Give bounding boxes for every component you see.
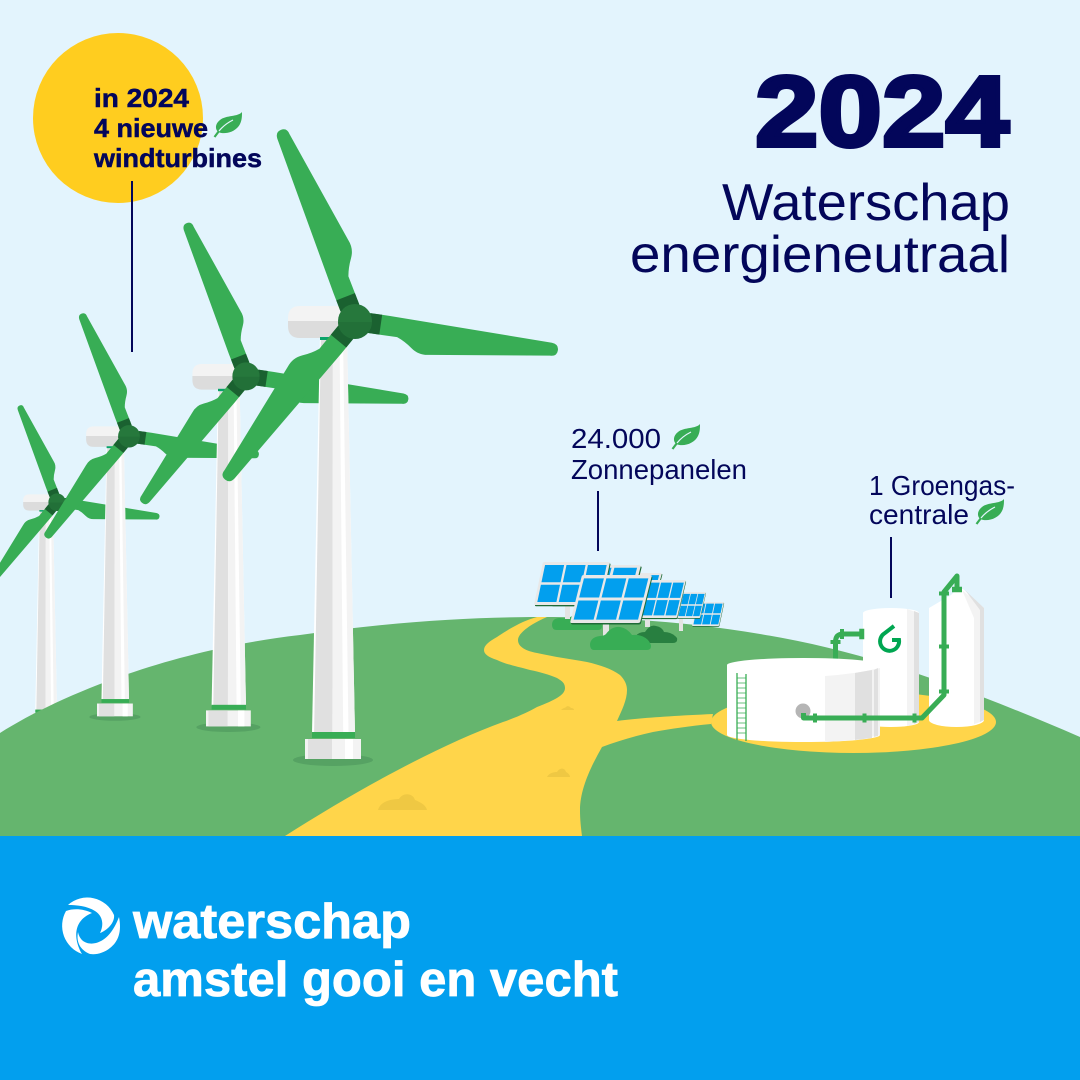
logo text: amstel gooi en vecht xyxy=(133,953,618,1007)
valve xyxy=(796,704,810,718)
panels: far row xyxy=(692,602,724,627)
label: groengascentrale: centrale xyxy=(869,499,969,530)
logo: water swirl xyxy=(62,898,120,954)
leader line: groengascentrale xyxy=(890,537,892,598)
green hill xyxy=(0,617,1080,836)
label: groengascentrale: 1 Groengas- xyxy=(869,470,1015,501)
groengas plant xyxy=(711,576,996,753)
title text: Waterschap xyxy=(722,174,1010,232)
leader line: windturbines xyxy=(131,181,133,352)
panels: front row xyxy=(534,562,611,606)
callout circle: sun xyxy=(33,33,203,203)
bush: left xyxy=(552,613,602,630)
title year: 2024 xyxy=(755,56,1009,168)
icon: leaf groengascentrale xyxy=(976,499,1004,524)
middle tank xyxy=(863,608,919,727)
wind turbine 1 (nearest) xyxy=(207,121,559,766)
label: zonnepanelen xyxy=(571,423,747,485)
main green pipe xyxy=(804,576,962,722)
wind turbine 2 xyxy=(128,216,409,732)
bush: front xyxy=(590,627,651,650)
solar panel field xyxy=(534,562,724,650)
logo text: waterschap xyxy=(132,895,411,949)
callout text: windturbines: 4 nieuwe xyxy=(94,113,208,143)
tall column right xyxy=(929,589,984,727)
callout text: windturbines: in 2024 xyxy=(94,83,190,113)
logo text xyxy=(132,895,618,1007)
wind turbine 3 xyxy=(34,308,260,721)
icon: G logo xyxy=(880,626,899,651)
icon: leaf zonnepanelen xyxy=(672,424,700,449)
bush: dark xyxy=(635,626,677,643)
leader line: zonnepanelen xyxy=(597,491,599,551)
icon: leaf windturbines xyxy=(214,112,242,137)
label: groengascentrale xyxy=(869,470,1015,530)
wind turbine 4 (furthest) xyxy=(0,401,160,723)
yellow road xyxy=(285,617,713,836)
road tufts xyxy=(378,706,574,810)
ladder xyxy=(737,673,746,741)
yellow pad xyxy=(711,691,996,753)
label: zonnepanelen: 24.000 xyxy=(571,423,661,454)
footer band xyxy=(0,836,1080,1080)
title text: energieneutraal xyxy=(630,226,1010,284)
panel poles xyxy=(565,605,683,638)
pipe: tank connector xyxy=(830,629,864,660)
title text xyxy=(630,174,1010,284)
wide storage tank xyxy=(727,658,880,742)
label: zonnepanelen: Zonnepanelen xyxy=(571,454,747,485)
callout text: windturbines xyxy=(93,83,262,173)
callout text: windturbines: windturbines xyxy=(93,143,262,173)
